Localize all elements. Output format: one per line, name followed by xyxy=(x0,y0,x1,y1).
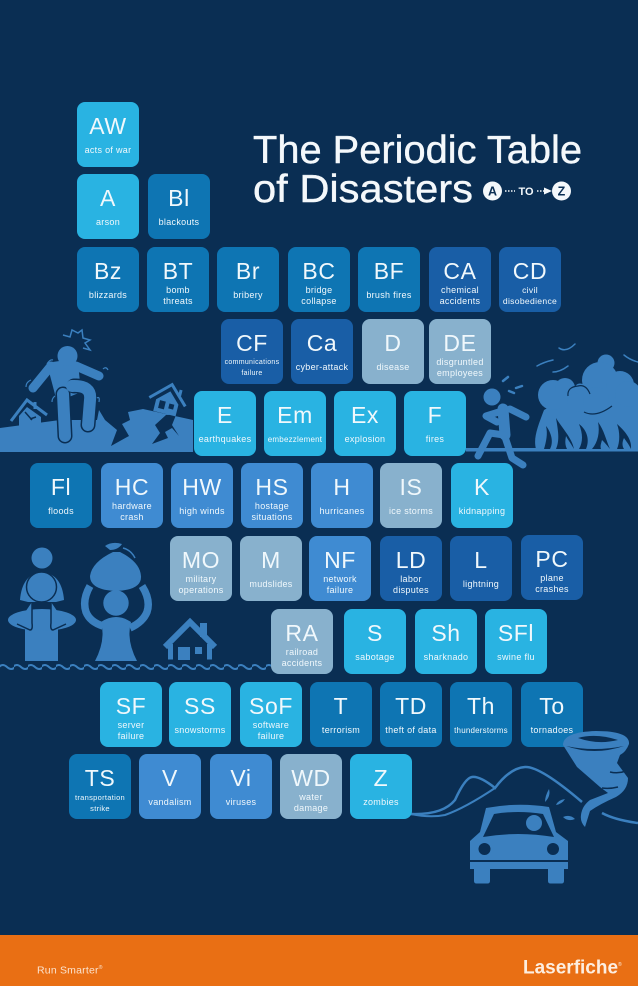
element tile LD: LD xyxy=(396,546,426,572)
element tile E: E xyxy=(217,402,233,428)
element tile A xyxy=(77,174,139,239)
element tile NF: NF xyxy=(324,546,356,572)
element tile SFl: SFl xyxy=(498,620,534,646)
element tile CF: CF xyxy=(236,330,268,356)
element tile Vi xyxy=(210,754,272,819)
element tile TD xyxy=(380,682,442,747)
element tile V xyxy=(139,754,201,819)
element tile F: F xyxy=(428,402,442,428)
element tile HW: high winds xyxy=(179,506,225,516)
element tile HW xyxy=(171,463,233,528)
logo wordmark: Laserfiche® xyxy=(523,957,622,978)
element tile Sh xyxy=(415,609,477,674)
element tile BC: BC xyxy=(302,258,336,284)
element tile TD: TD xyxy=(395,692,427,718)
element tile Bz: blizzards xyxy=(89,290,127,300)
element tile CA: chemical xyxy=(441,285,479,295)
element tile F xyxy=(404,391,466,456)
element tile AW xyxy=(77,102,139,167)
element tile Fl: Fl xyxy=(51,474,71,500)
element tile TS: TS xyxy=(85,764,115,790)
element tile CD xyxy=(499,247,561,312)
element tile Z: zombies xyxy=(363,796,399,806)
element tile HC xyxy=(101,463,163,528)
element tile Bl xyxy=(148,174,210,239)
element tile HS: situations xyxy=(251,512,293,522)
element tile V: vandalism xyxy=(148,796,192,806)
element tile SF xyxy=(100,682,162,747)
element tile DE: disgruntled xyxy=(436,357,484,367)
element tile D xyxy=(362,319,424,384)
element tile WD xyxy=(280,754,342,819)
element tile Br: Br xyxy=(236,258,260,284)
element tile Ex xyxy=(334,391,396,456)
element tile Br xyxy=(217,247,279,312)
element tile WD: damage xyxy=(294,803,328,813)
element tile Z xyxy=(350,754,412,819)
element tile RA xyxy=(271,609,333,674)
element tile BC: collapse xyxy=(301,296,337,306)
element tile AW: AW xyxy=(89,112,127,138)
element tile Fl: floods xyxy=(48,506,74,516)
element tile NF: failure xyxy=(327,585,353,595)
element tile V: V xyxy=(162,764,178,790)
illustration: flood scene xyxy=(0,543,272,671)
a to z badge: Z xyxy=(558,184,566,198)
element tile M: mudslides xyxy=(249,578,293,588)
element tile BF: brush fires xyxy=(366,290,412,300)
element tile H xyxy=(311,463,373,528)
illustration: fire scene xyxy=(466,344,638,465)
element tile Ca: Ca xyxy=(307,330,337,356)
element tile PC: PC xyxy=(535,546,569,572)
element tile Br: bribery xyxy=(233,290,263,300)
element tile IS: IS xyxy=(400,474,422,500)
element tile PC: plane xyxy=(540,573,564,583)
element tile BT: threats xyxy=(163,296,193,306)
element tile Bz: Bz xyxy=(94,258,122,284)
element tile MO: operations xyxy=(178,585,224,595)
element tile TS: transportation xyxy=(75,793,125,802)
element tile RA: accidents xyxy=(282,658,322,668)
element tile CF: communications xyxy=(225,359,279,366)
element tile S: sabotage xyxy=(355,652,395,662)
element tile S xyxy=(344,609,406,674)
element tile SF: server xyxy=(118,720,144,730)
element tile SoF: software xyxy=(253,720,289,730)
element tile T: terrorism xyxy=(322,724,360,734)
element tile LD: disputes xyxy=(393,585,429,595)
element tile BT: BT xyxy=(163,258,193,284)
element tile H: H xyxy=(333,474,351,500)
element tile CA: accidents xyxy=(440,296,480,306)
element tile DE xyxy=(429,319,491,384)
element tile WD: WD xyxy=(291,764,331,790)
element tile H: hurricanes xyxy=(319,506,365,516)
element tile MO xyxy=(170,536,232,601)
element tile AW: acts of war xyxy=(85,144,131,154)
element tile LD xyxy=(380,536,442,601)
element tile CD: disobedience xyxy=(503,296,557,306)
element tile SS xyxy=(169,682,231,747)
element tile D: disease xyxy=(376,362,410,372)
illustration: earthquake scene xyxy=(0,330,193,452)
element tile To xyxy=(521,682,583,747)
element tile TS xyxy=(69,754,131,819)
element tile BF xyxy=(358,247,420,312)
element tile PC xyxy=(521,535,583,600)
element tile BF: BF xyxy=(374,258,404,284)
element tile HW: HW xyxy=(182,474,222,500)
element tile CD: civil xyxy=(522,285,538,295)
element tile T: T xyxy=(334,692,348,718)
element tile E: earthquakes xyxy=(199,434,251,444)
illustration: road and car xyxy=(411,767,638,884)
element tile HS xyxy=(241,463,303,528)
element tile SS: SS xyxy=(184,692,216,718)
element tile NF: network xyxy=(323,574,357,584)
element tile M xyxy=(240,536,302,601)
element tile E xyxy=(194,391,256,456)
element tile Z: Z xyxy=(374,764,388,790)
element tile HS: hostage xyxy=(255,501,289,511)
element tile Em: embezzlement xyxy=(268,434,322,444)
element tile DE: employees xyxy=(437,368,483,378)
element tile Th: Th xyxy=(467,692,495,718)
element tile Vi: Vi xyxy=(230,764,252,790)
element tile MO: military xyxy=(186,574,216,584)
element tile IS xyxy=(380,463,442,528)
element tile SoF: failure xyxy=(258,731,284,741)
element tile HC: hardware xyxy=(112,501,152,511)
element tile Bz xyxy=(77,247,139,312)
element tile Th xyxy=(450,682,512,747)
element tile TS: strike xyxy=(90,804,110,813)
element tile SFl xyxy=(485,609,547,674)
element tile To: To xyxy=(539,692,565,718)
element tile BC: bridge xyxy=(306,285,332,295)
a to z badge: A xyxy=(488,184,497,198)
element tile L: L xyxy=(474,546,488,572)
element tile S: S xyxy=(367,620,383,646)
a to z badge xyxy=(483,182,571,200)
element tile Bl: Bl xyxy=(168,184,190,210)
element tile MO: MO xyxy=(182,546,220,572)
element tile CA xyxy=(429,247,491,312)
element tile Em: Em xyxy=(277,402,313,428)
element tile Ex: Ex xyxy=(351,402,379,428)
element tile CF xyxy=(221,319,283,384)
element tile HS: HS xyxy=(255,474,289,500)
element tile IS: ice storms xyxy=(389,506,433,516)
element tile Ex: explosion xyxy=(345,434,385,444)
element tile L: lightning xyxy=(463,578,499,588)
element tile SF: failure xyxy=(118,731,144,741)
element tile NF xyxy=(309,536,371,601)
element tile K: kidnapping xyxy=(459,506,505,516)
element tile Em xyxy=(264,391,326,456)
element tile A: A xyxy=(100,184,116,210)
element tile SoF xyxy=(240,682,302,747)
element tile PC: crashes xyxy=(535,584,569,594)
element tile WD: water xyxy=(299,792,323,802)
element tile Sh: Sh xyxy=(431,620,461,646)
title second line: of Disasters xyxy=(253,168,473,211)
a to z badge: TO xyxy=(518,186,534,198)
element tile BT: bomb xyxy=(166,285,190,295)
element tile T xyxy=(310,682,372,747)
title: The Periodic Table xyxy=(253,129,582,172)
element tile SFl: swine flu xyxy=(497,652,535,662)
element tile Vi: viruses xyxy=(226,796,256,806)
element tile F: fires xyxy=(426,434,444,444)
element tile K xyxy=(451,463,513,528)
footer bar xyxy=(0,935,638,986)
element tile Sh: sharknado xyxy=(424,652,468,662)
element tile Bl: blackouts xyxy=(159,216,199,226)
element tile Fl xyxy=(30,463,92,528)
element tile Th: thunderstorms xyxy=(454,726,508,734)
element tile CF: failure xyxy=(241,370,263,377)
element tile SS: snowstorms xyxy=(174,724,226,734)
element tile Ca: cyber-attack xyxy=(296,362,348,372)
element tile BC xyxy=(288,247,350,312)
element tile LD: labor xyxy=(400,574,422,584)
element tile M: M xyxy=(261,546,281,572)
element tile A: arson xyxy=(96,216,120,226)
element tile L xyxy=(450,536,512,601)
element tile Ca xyxy=(291,319,353,384)
element tile BT xyxy=(147,247,209,312)
element tile RA: RA xyxy=(285,620,319,646)
element tile CD: CD xyxy=(513,258,547,284)
element tile SoF: SoF xyxy=(249,692,293,718)
element tile D: D xyxy=(384,330,402,356)
tagline: Run Smarter® xyxy=(37,964,103,976)
element tile To: tornadoes xyxy=(531,724,573,734)
element tile HC: crash xyxy=(120,512,144,522)
element tile K: K xyxy=(474,474,490,500)
element tile HC: HC xyxy=(115,474,149,500)
element tile SF: SF xyxy=(116,692,146,718)
element tile CA: CA xyxy=(443,258,477,284)
element tile TD: theft of data xyxy=(385,724,437,734)
element tile RA: railroad xyxy=(286,647,318,657)
element tile DE: DE xyxy=(443,330,477,356)
